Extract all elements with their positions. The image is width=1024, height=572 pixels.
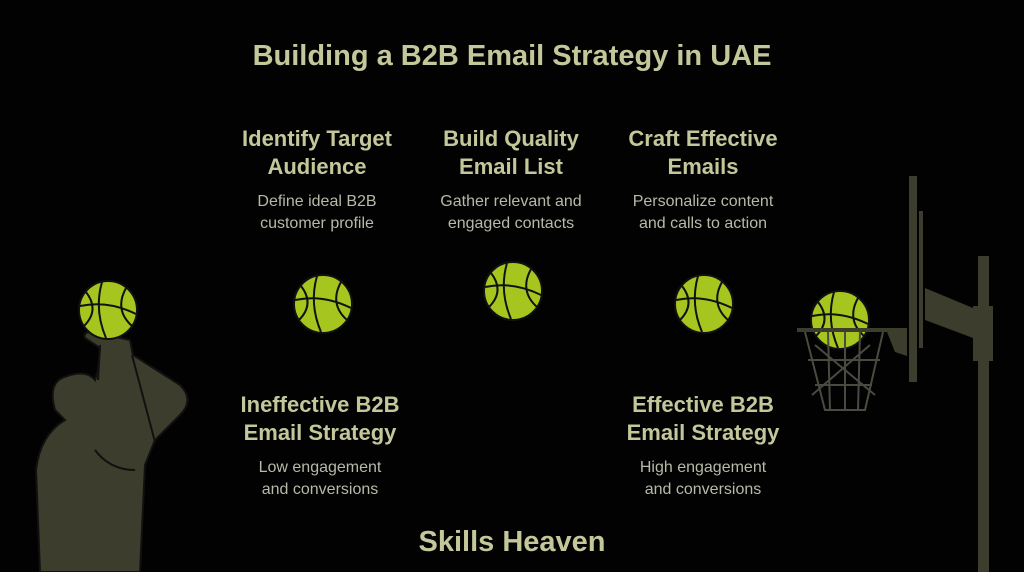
title: Building a B2B Email Strategy in UAE [253,40,771,72]
icon: player [36,332,188,572]
outcome: effective: High engagement and conversions [640,459,766,498]
icon: hoop [797,176,993,572]
step: craft effective emails: Craft Effective Emails [628,126,778,179]
step: build quality email list [440,126,582,232]
outcome: ineffective: Low engagement and conversions [259,459,381,498]
step: build quality email list: Gather relevant and engaged contacts [440,193,582,232]
icon: ball 3 [675,275,733,333]
icon: ball 2 [484,262,542,320]
step: build quality email list: Build Quality Email List [443,126,579,179]
footer brand: Skills Heaven [418,526,606,558]
step: identify target audience: Identify Target Audience [242,126,392,179]
step: identify target audience: Define ideal B2B customer profile [257,193,377,232]
outcome: effective [627,392,780,498]
outcome: ineffective: Ineffective B2B Email Strategy [241,392,399,445]
step: craft effective emails [628,126,778,232]
step: identify target audience [242,126,392,232]
outcome: effective: Effective B2B Email Strategy [627,392,779,445]
outcome: ineffective [241,392,399,498]
step: craft effective emails: Personalize content and calls to action [633,193,773,232]
icon: ball 1 [294,275,352,333]
icon: ball player [79,281,137,339]
